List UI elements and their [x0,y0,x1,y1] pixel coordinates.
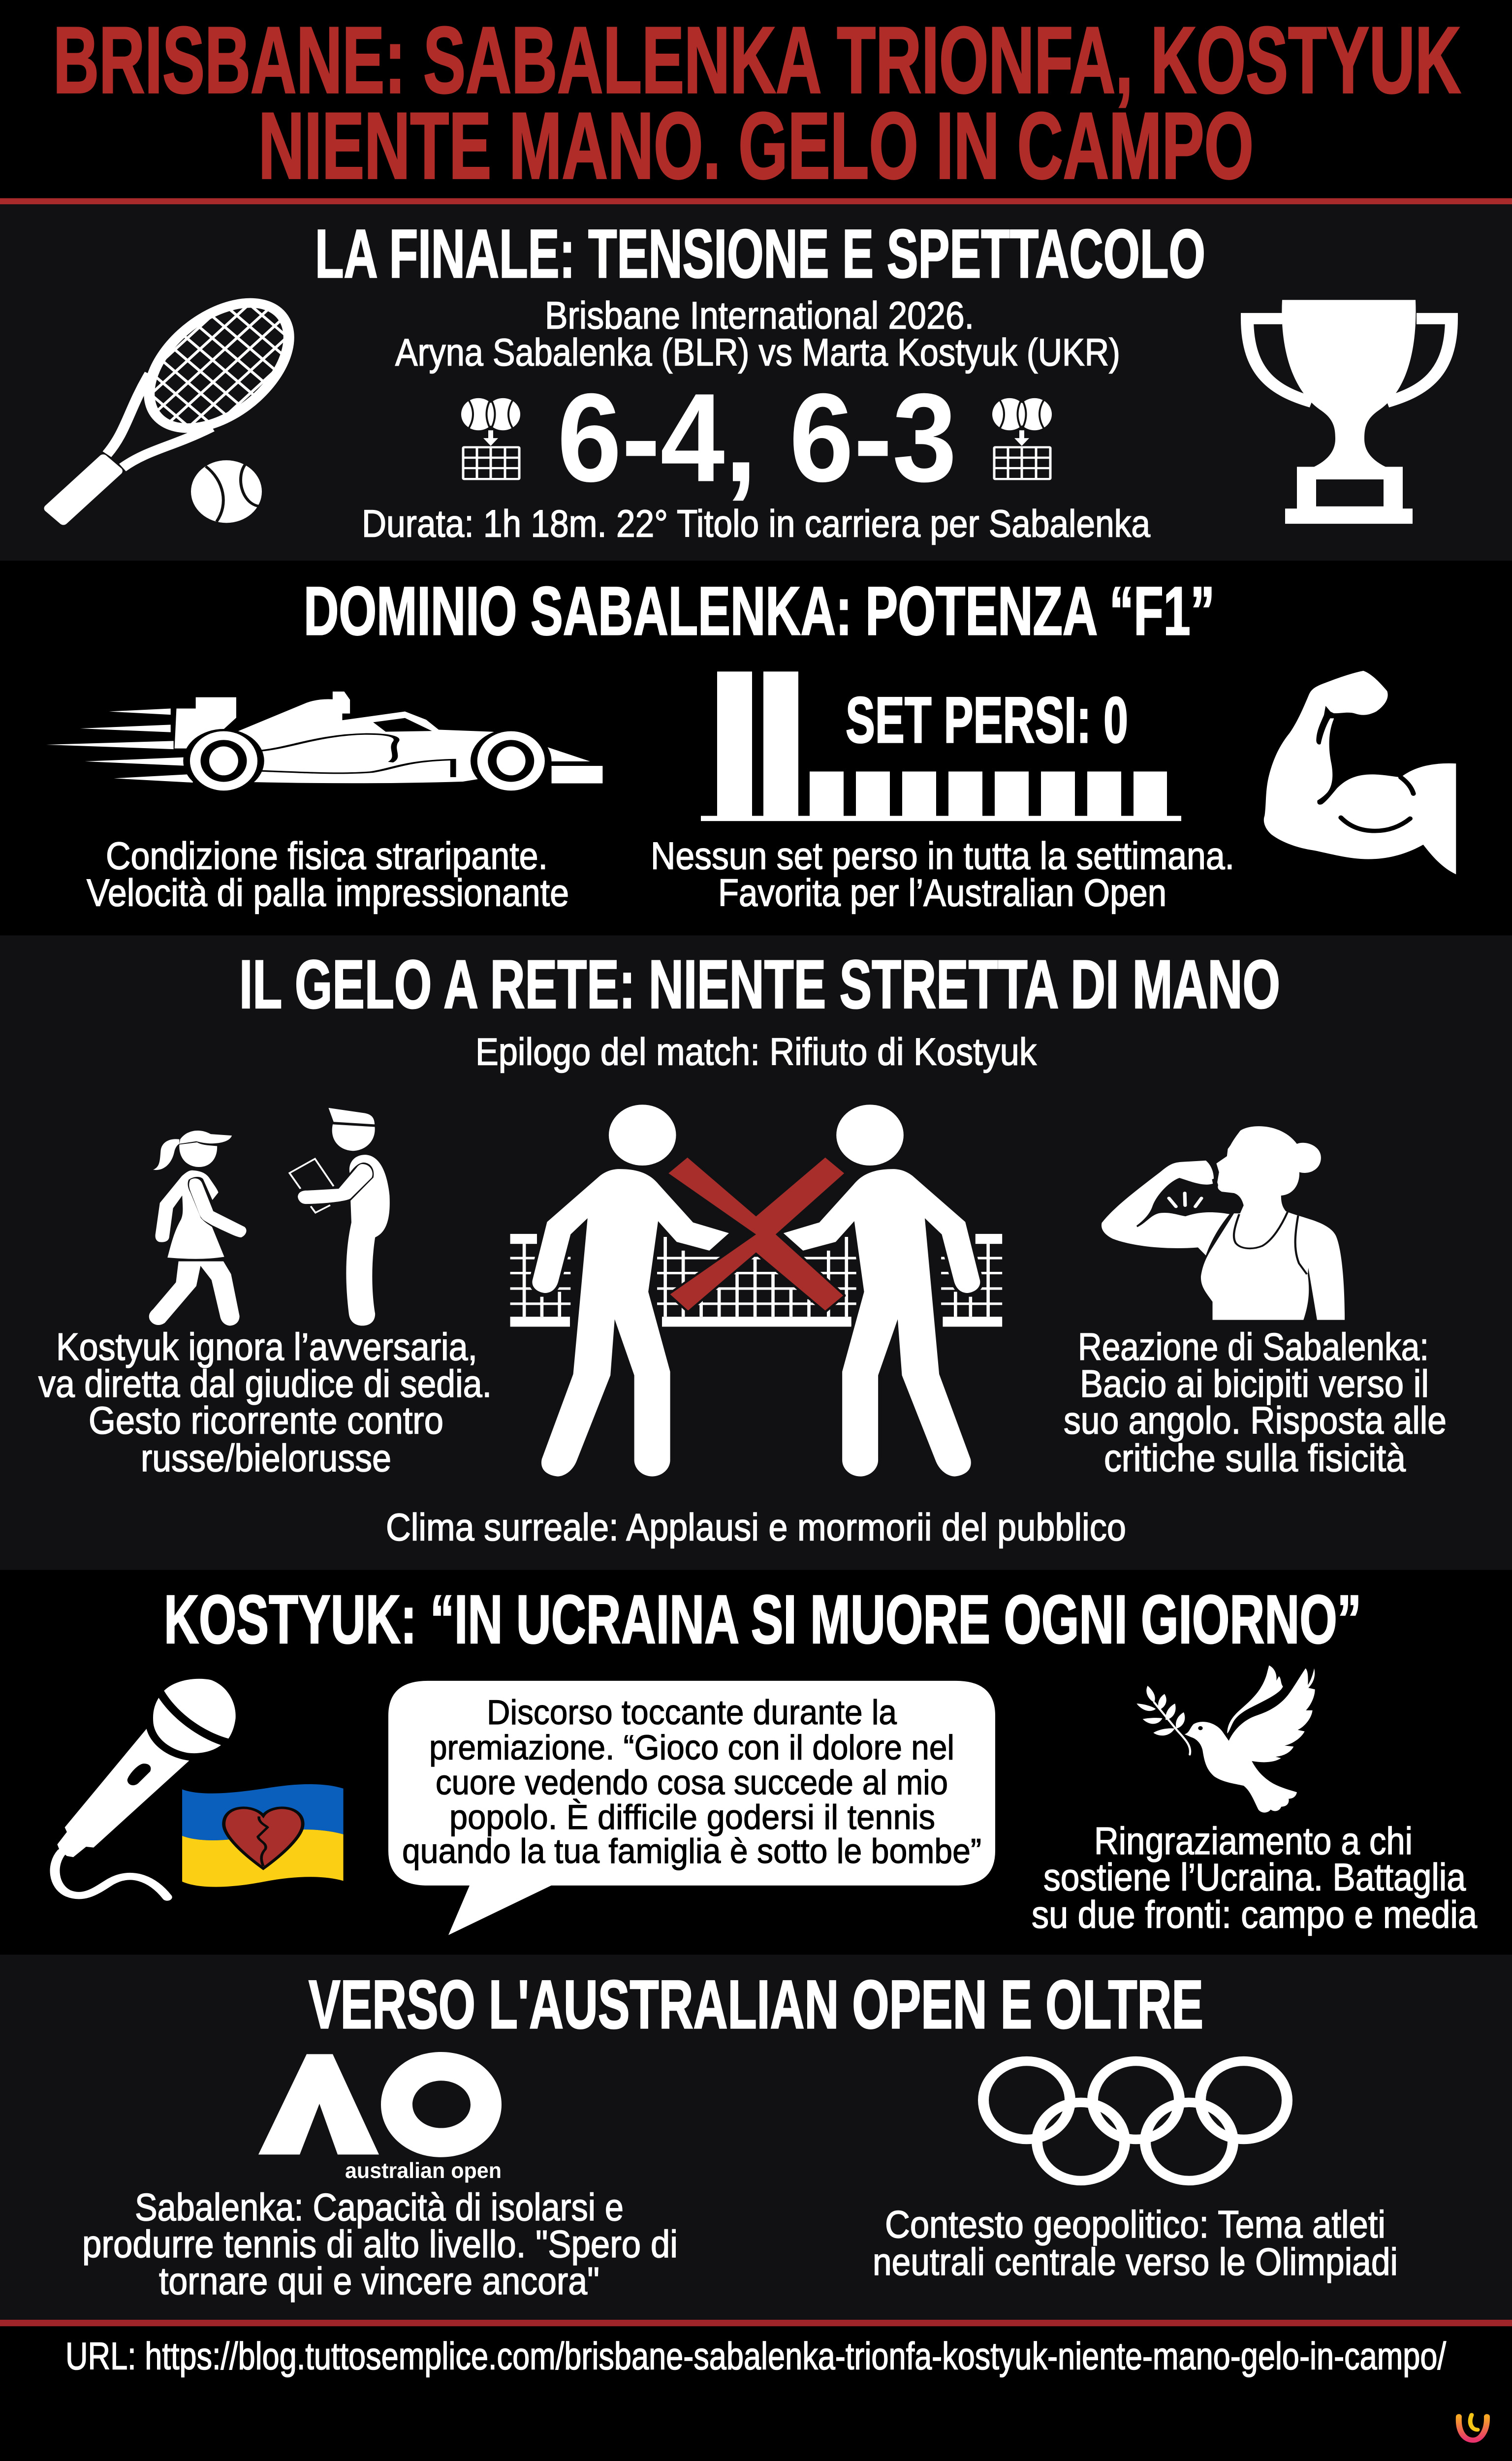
text: kostyuk ignora: va diretta dal giudice di sedia. [38,1362,492,1405]
icon: tennis net [510,1234,1002,1326]
text: sabalenka capacita [82,2186,678,2303]
icon: australian open logo [258,2052,502,2182]
text: ringraziamento: Ringraziamento a chi [1094,1820,1413,1862]
text: clima surreale: Clima surreale: Applausi e mormorii del pubblico [386,1506,1126,1548]
icon: dove with olive branch [1136,1666,1315,1813]
icon: flexed bicep [1264,671,1456,874]
panel: verso australian open [0,1955,1512,2326]
icon: ukrainian flag with broken heart [182,1784,344,1887]
chart: set persi bars [701,671,1181,821]
text: reazione di sabalenka [1064,1325,1447,1480]
text: discorso: popolo. È difficile godersi il tennis [449,1798,935,1836]
icon: brand logo [1459,2415,1487,2440]
icon: balls into net left [461,398,520,479]
text: discorso: Discorso toccante durante la [487,1693,897,1732]
icon: broken heart [224,1808,303,1868]
text: epilogo: Epilogo del match: Rifiuto di Kostyuk [475,1030,1037,1073]
text: reazione di sabalenka: Bacio ai bicipiti verso il [1080,1362,1429,1405]
icon: woman walking [149,1131,247,1325]
panel: kostyuk discorso [55,1581,1478,1936]
text: ringraziamento [1032,1820,1478,1936]
icon: left player [532,1104,729,1477]
text: contesto geopolitico [873,2203,1398,2283]
label: set persi: SET PERSI: 0 [846,683,1128,756]
text: nessun set perso [651,834,1234,914]
text: reazione di sabalenka: critiche sulla fisicità [1104,1437,1406,1480]
text: condizione fisica: Velocità di palla impressionante [87,871,569,914]
label: australian open: australian open [345,2158,502,2182]
text: kostyuk ignora: russe/bielorusse [141,1437,391,1480]
icon: F1 car [46,692,602,793]
icon: olympic rings [983,2061,1287,2180]
text: contesto geopolitico: Contesto geopolitico: Tema atleti [885,2203,1386,2246]
panel: dominio sabalenka [46,572,1456,914]
text: sabalenka capacita: tornare qui e vincere ancora" [159,2260,599,2303]
icon: chair umpire [289,1108,390,1325]
icon: red cross [668,1158,844,1311]
text: match info [395,294,1120,374]
icon: balls into net right [992,398,1052,479]
text: kostyuk ignora: Kostyuk ignora l’avversaria, [56,1325,477,1368]
icon: woman kissing biceps [1102,1126,1345,1320]
speech bubble [388,1681,995,1935]
icon: two players at net with red cross [510,1104,1002,1477]
icon: right player [784,1104,980,1477]
text: sabalenka capacita: produrre tennis di alto livello. "Spero di [82,2223,678,2266]
text: condizione fisica [87,834,569,914]
text: kostyuk ignora [38,1325,492,1480]
icon: tennis racket [44,298,294,525]
text: nessun set perso: Nessun set perso in tutta la settimana. [651,834,1234,877]
text: sabalenka capacita: Sabalenka: Capacità di isolarsi e [135,2186,624,2229]
text: discorso [402,1693,981,1870]
text: nessun set perso: Favorita per l’Australian Open [718,871,1166,914]
text: match info: Aryna Sabalenka (BLR) vs Marta Kostyuk (UKR) [395,331,1120,374]
text: discorso: quando la tua famiglia è sotto le bombe” [402,1831,981,1870]
icon: tennis ball [191,460,262,523]
icon: microphone [55,1679,236,1897]
text: condizione fisica: Condizione fisica straripante. [106,834,548,877]
text: kostyuk ignora: Gesto ricorrente contro [89,1399,443,1442]
text: duration: Durata: 1h 18m. 22° Titolo in carriera per Sabalenka [362,502,1151,545]
text: discorso: cuore vedendo cosa succede al mio [436,1763,948,1801]
title [53,8,1461,198]
text: discorso: premiazione. “Gioco con il dolore nel [429,1728,954,1767]
text: match info: Brisbane International 2026. [545,294,974,337]
panel: il gelo a rete [0,935,1512,1570]
icon: trophy [1247,300,1451,524]
panel: la finale [0,198,1512,561]
score: 6-4, 6-3 [557,367,957,508]
